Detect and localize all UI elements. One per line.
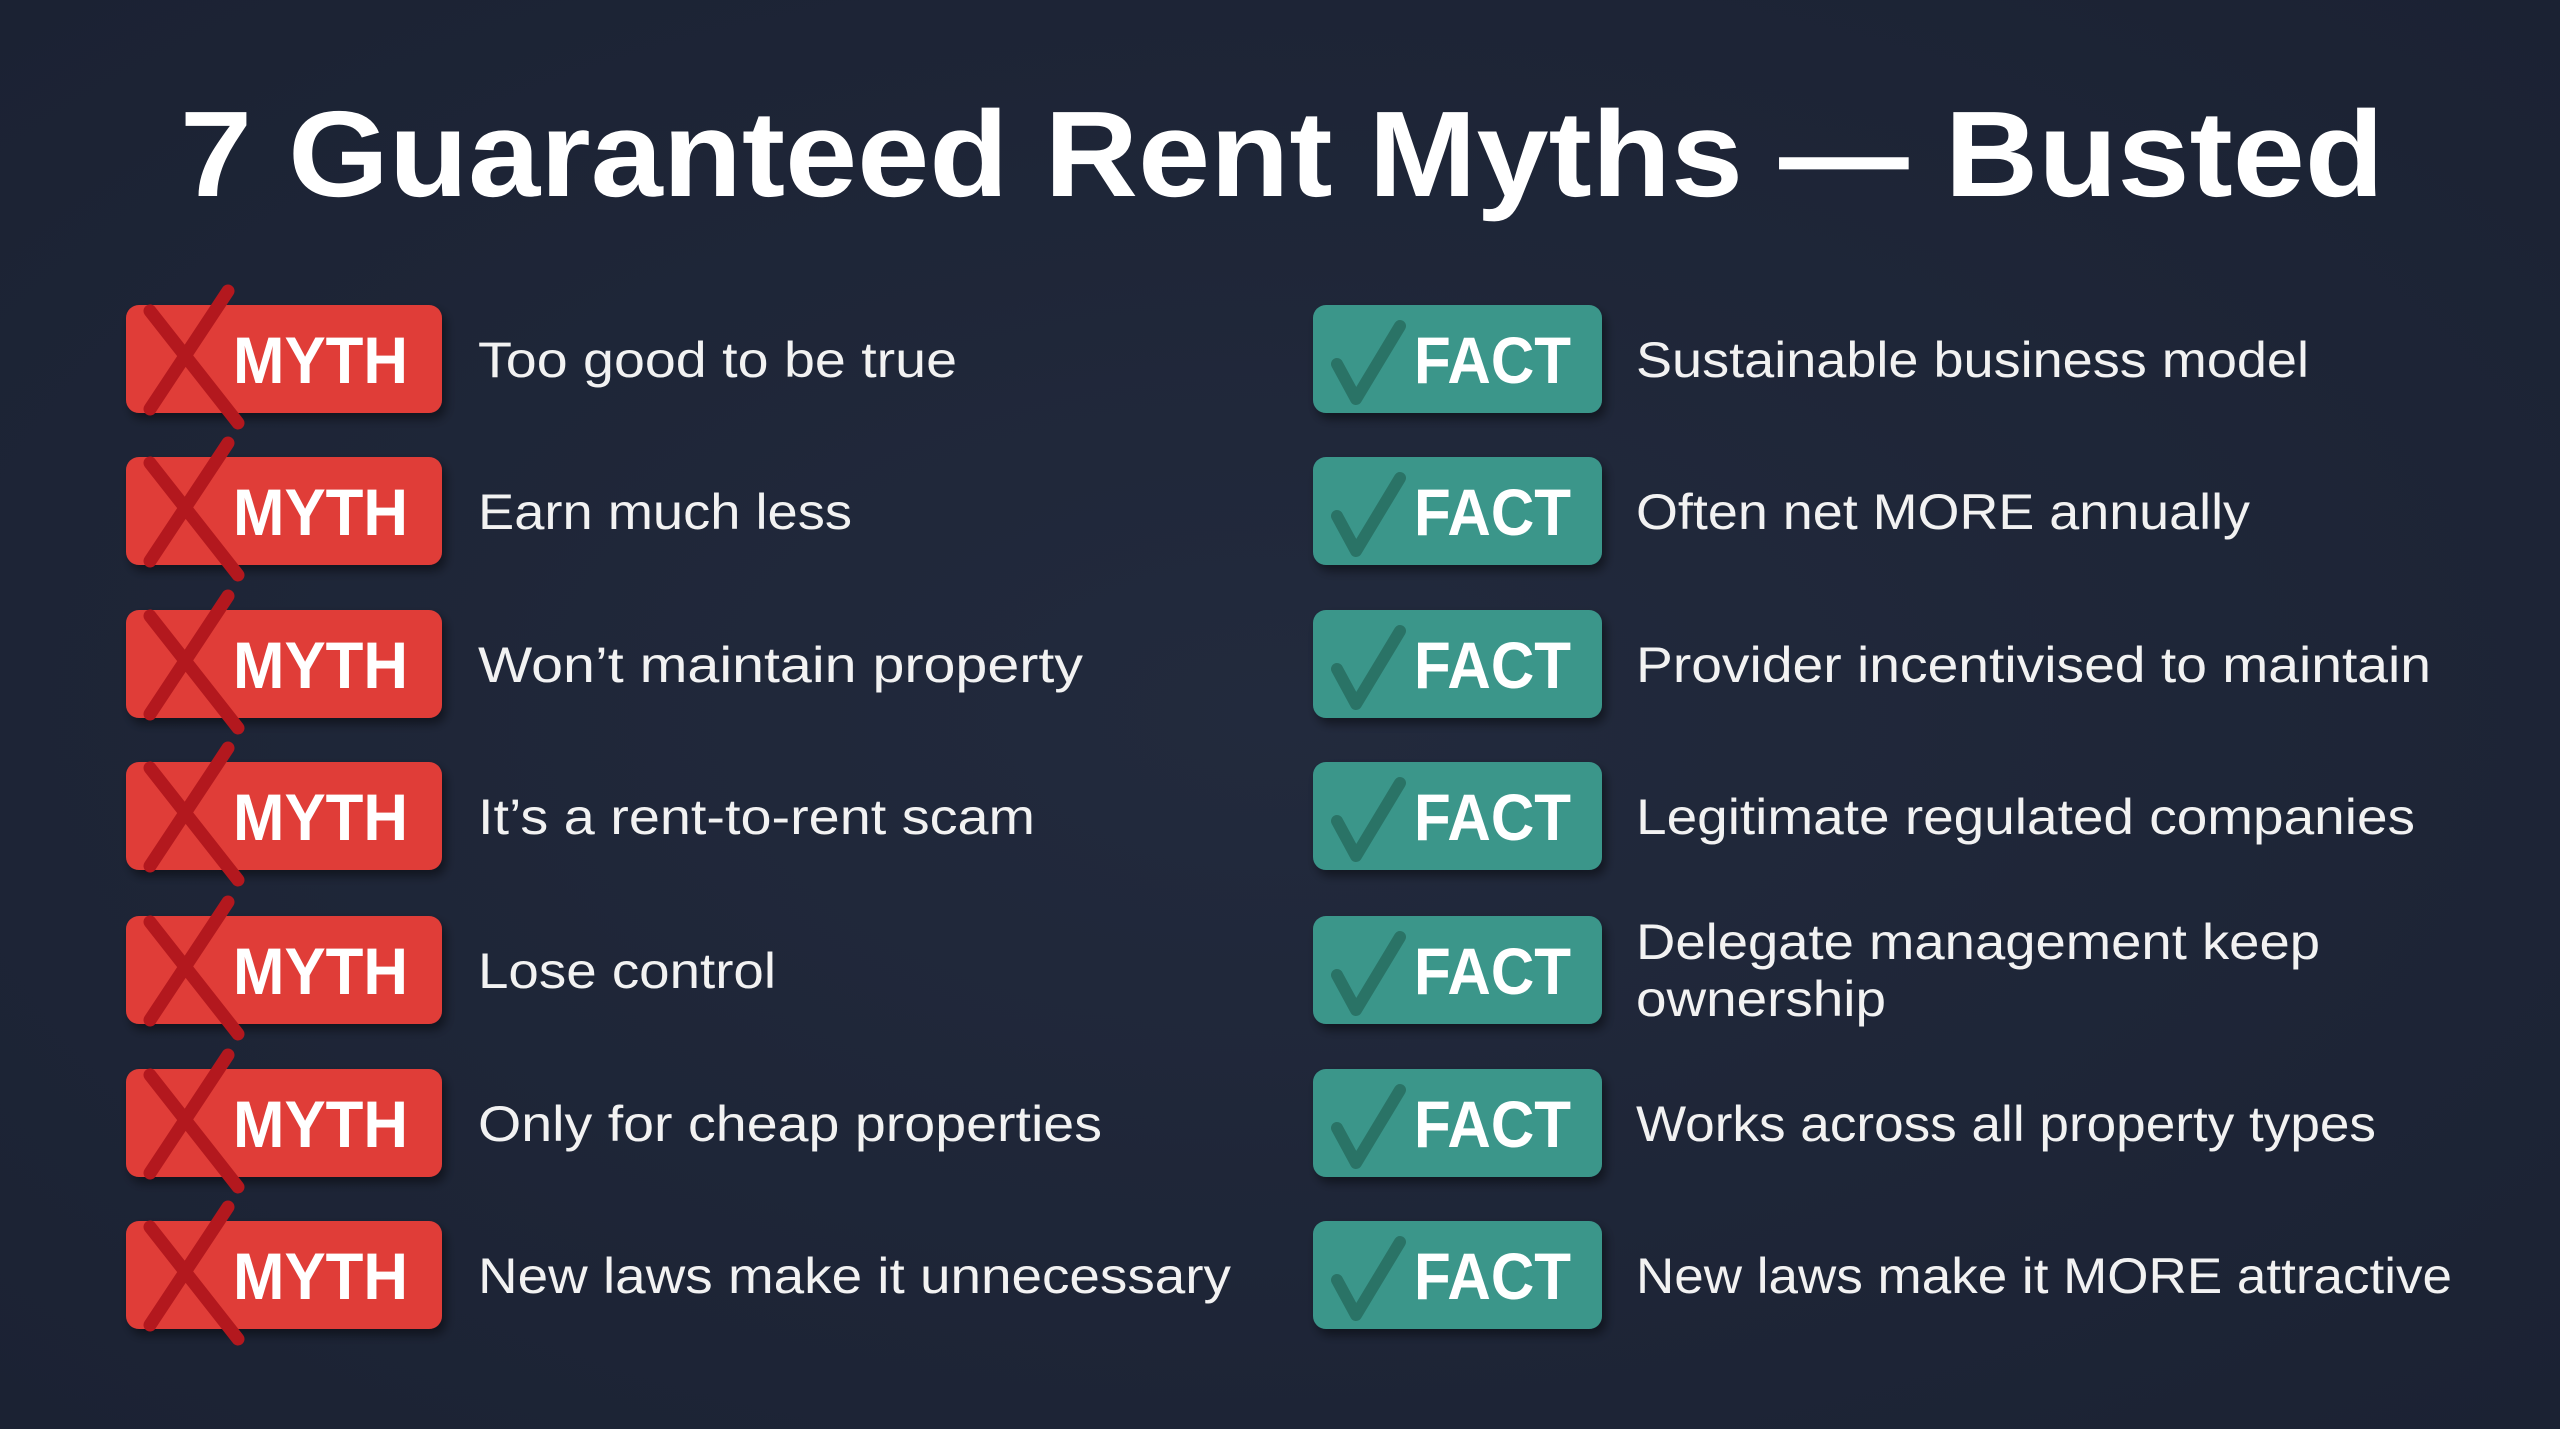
myth row 7: MYTH xyxy=(233,1239,408,1313)
fact row 3: Provider incentivised to maintain xyxy=(1636,637,2431,693)
myth row 6: Only for cheap properties xyxy=(478,1096,1102,1152)
fact row 4: Legitimate regulated companies xyxy=(1636,789,2415,845)
myth row 3: Won’t maintain property xyxy=(478,637,1083,693)
myth row 7: New laws make it unnecessary xyxy=(478,1248,1231,1304)
myth row 1: Too good to be true xyxy=(478,332,957,388)
fact row 6: Works across all property types xyxy=(1636,1096,2376,1152)
fact row 3: FACT xyxy=(1414,628,1571,702)
fact row 5: FACT xyxy=(1414,934,1571,1008)
myth row 5: Lose control xyxy=(478,943,776,999)
fact row 1 xyxy=(1313,305,2309,413)
title: 7 Guaranteed Rent Myths — Busted xyxy=(180,86,2384,222)
myth row 6: MYTH xyxy=(233,1087,408,1161)
fact row 5 xyxy=(1313,914,2320,1027)
fact row 7: New laws make it MORE attractive xyxy=(1636,1248,2452,1304)
myth row 7 xyxy=(126,1207,1231,1339)
myth row 2: Earn much less xyxy=(478,484,852,540)
myth row 2: MYTH xyxy=(233,475,408,549)
fact row 1: FACT xyxy=(1414,323,1571,397)
fact row 1: Sustainable business model xyxy=(1636,332,2309,388)
fact column xyxy=(1313,305,2452,1329)
myth row 1 xyxy=(126,291,957,423)
fact row 7 xyxy=(1313,1221,2452,1329)
myth column xyxy=(126,291,1231,1339)
myth row 6 xyxy=(126,1055,1102,1187)
myth row 5 xyxy=(126,902,776,1034)
fact row 7: FACT xyxy=(1414,1239,1571,1313)
myth row 4: MYTH xyxy=(233,780,408,854)
myth row 5: MYTH xyxy=(233,934,408,1008)
fact row 2 xyxy=(1313,457,2250,565)
fact row 6 xyxy=(1313,1069,2376,1177)
fact row 4 xyxy=(1313,762,2415,870)
fact row 4: FACT xyxy=(1414,780,1571,854)
myth row 3: MYTH xyxy=(233,628,408,702)
myth row 4 xyxy=(126,748,1035,880)
myth row 3 xyxy=(126,596,1083,728)
fact row 2: Often net MORE annually xyxy=(1636,484,2250,540)
fact row 6: FACT xyxy=(1414,1087,1571,1161)
fact row 5: ownership xyxy=(1636,971,1886,1027)
fact row 3 xyxy=(1313,610,2431,718)
myth row 1: MYTH xyxy=(233,323,408,397)
myth row 2 xyxy=(126,443,852,575)
myth row 4: It’s a rent-to-rent scam xyxy=(478,789,1035,845)
fact row 2: FACT xyxy=(1414,475,1571,549)
fact row 5: Delegate management keep xyxy=(1636,914,2320,970)
